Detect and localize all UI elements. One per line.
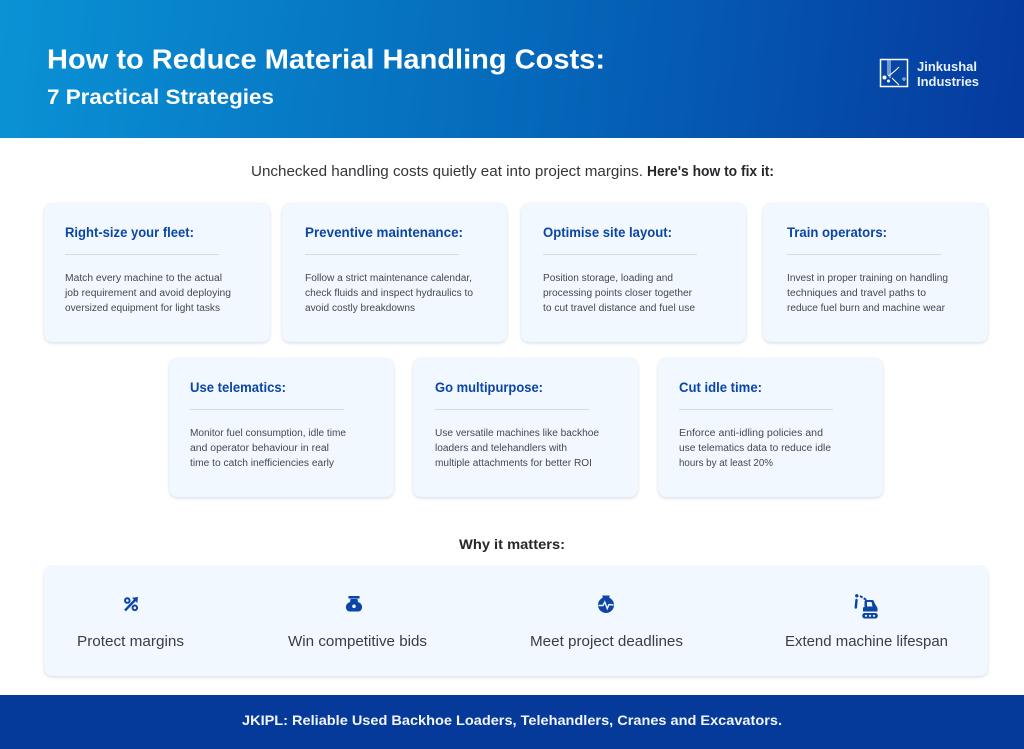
panel: optimise site layout: Position storage, loading and: [543, 273, 673, 284]
panel: preventive maintenance: [282, 203, 507, 342]
panel: cut idle time: Enforce anti-idling policies and: [679, 428, 823, 439]
panel: go multipurpose: multiple attachments for better ROI: [435, 458, 592, 469]
icon: money bag: [346, 596, 362, 612]
panel: train operators: reduce fuel burn and machine wear: [787, 303, 946, 314]
icon: logo mark: [880, 60, 908, 86]
intro text: Unchecked handling costs quietly eat into project margins.: [251, 164, 643, 180]
panel: right-size your fleet: job requirement and avoid deploying: [64, 288, 231, 299]
intro text: Here's how to fix it:: [647, 164, 774, 180]
panel: cut idle time: Cut idle time:: [679, 380, 762, 395]
footer text: JKIPL: Reliable Used Backhoe Loaders, Telehandlers, Cranes and Excavators.: [242, 712, 782, 728]
logo: [880, 59, 979, 89]
panel: go multipurpose: [413, 358, 638, 497]
panel: optimise site layout: processing points closer together: [543, 288, 693, 299]
icon: percent: [125, 597, 138, 610]
panel: right-size your fleet: [44, 203, 270, 342]
panel: cut idle time: use telematics data to reduce idle: [679, 443, 831, 454]
panel: go multipurpose: Go multipurpose:: [435, 380, 543, 395]
panel: go multipurpose: Use versatile machines like backhoe: [435, 428, 599, 439]
logo: Industries: [917, 74, 979, 89]
panel: use telematics: time to catch inefficiencies early: [190, 458, 334, 469]
panel: use telematics: Use telematics:: [190, 380, 286, 395]
panel: cut idle time: [658, 358, 883, 497]
panel: preventive maintenance: Preventive maintenance:: [305, 225, 463, 240]
panel: right-size your fleet: oversized equipment for light tasks: [65, 303, 220, 314]
panel: why it matters: [44, 566, 988, 676]
panel: go multipurpose: loaders and telehandlers with: [435, 443, 567, 454]
label: meet project deadlines: Meet project deadlines: [530, 634, 683, 650]
subtitle: 7 Practical Strategies: [47, 86, 274, 109]
footer bar: [0, 695, 1024, 749]
logo text: Jinkushal: [917, 59, 977, 74]
panel: preventive maintenance: Follow a strict maintenance calendar,: [305, 273, 472, 284]
panel: use telematics: and operator behaviour in real: [190, 443, 329, 454]
panel: train operators: techniques and travel paths to: [787, 288, 926, 299]
heading: why it matters: Why it matters:: [459, 536, 565, 552]
icon: stopwatch with pulse: [598, 596, 614, 613]
icon: excavator: [855, 594, 878, 618]
title: How to Reduce Material Handling Costs:: [47, 44, 605, 74]
panel: optimise site layout: [521, 203, 746, 342]
header banner: [0, 0, 1024, 138]
panel: train operators: Train operators:: [787, 225, 887, 240]
panel: train operators: [763, 203, 988, 342]
label: protect margins: Protect margins: [77, 634, 184, 650]
panel: optimise site layout: to cut travel distance and fuel use: [543, 303, 695, 314]
panel: preventive maintenance: avoid costly breakdowns: [305, 303, 415, 314]
panel: preventive maintenance: check fluids and inspect hydraulics to: [305, 288, 473, 299]
panel: right-size your fleet: Right-size your fleet:: [65, 225, 194, 240]
panel: cut idle time: hours by at least 20%: [679, 458, 773, 469]
label: win competitive bids: Win competitive bids: [288, 634, 427, 650]
panel: optimise site layout: Optimise site layout:: [543, 225, 672, 240]
panel: train operators: Invest in proper training on handling: [787, 273, 948, 284]
label: extend machine lifespan: Extend machine lifespan: [785, 634, 948, 650]
panel: use telematics: [169, 358, 394, 497]
panel: use telematics: Monitor fuel consumption, idle time: [190, 428, 346, 439]
panel: right-size your fleet: Match every machine to the actual: [65, 273, 222, 284]
